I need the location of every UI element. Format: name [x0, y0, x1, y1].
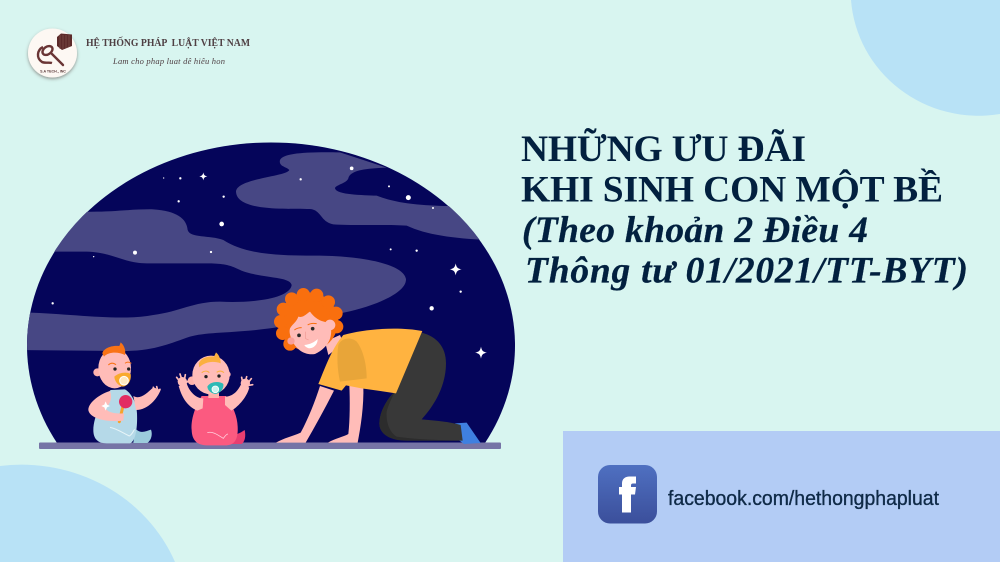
shirt	[318, 329, 422, 393]
icon: facebook	[598, 465, 657, 524]
baby one with rattle	[88, 342, 161, 443]
title: KHI SINH CON MỘT BỀ	[521, 168, 943, 210]
decorative circle: bottom left	[0, 465, 175, 562]
face	[290, 312, 331, 354]
mother crawling	[274, 288, 481, 444]
title: NHỮNG ƯU ĐÃI	[521, 126, 806, 170]
stars	[51, 166, 487, 359]
milky way clouds	[20, 152, 487, 351]
facebook address: facebook.com/hethongphapluat	[668, 488, 939, 510]
logo badge	[28, 28, 77, 78]
neck	[325, 335, 343, 355]
front arm	[276, 386, 334, 443]
trousers	[379, 333, 463, 441]
illustration: night sky globe	[20, 142, 515, 443]
slogan: Lam cho phap luat dê hiêu hon	[112, 56, 225, 66]
shoe	[455, 423, 481, 444]
logo badge: S.A TECH., INC	[40, 70, 66, 74]
floor line	[39, 442, 501, 449]
title: Thông tư 01/2021/TT-BYT)	[525, 250, 968, 292]
logo block	[28, 28, 250, 78]
panel: facebook contact	[563, 431, 1000, 562]
baby two with pacifier	[177, 352, 253, 445]
back arm	[328, 385, 363, 443]
title	[521, 126, 968, 292]
sleeve shade	[337, 338, 367, 382]
hair	[274, 288, 343, 351]
title: (Theo khoản 2 Điều 4	[522, 210, 868, 251]
decorative circle: top right	[851, 0, 1000, 116]
organisation name: HỆ THỐNG PHÁP LUẬT VIỆT NAM	[86, 36, 250, 49]
